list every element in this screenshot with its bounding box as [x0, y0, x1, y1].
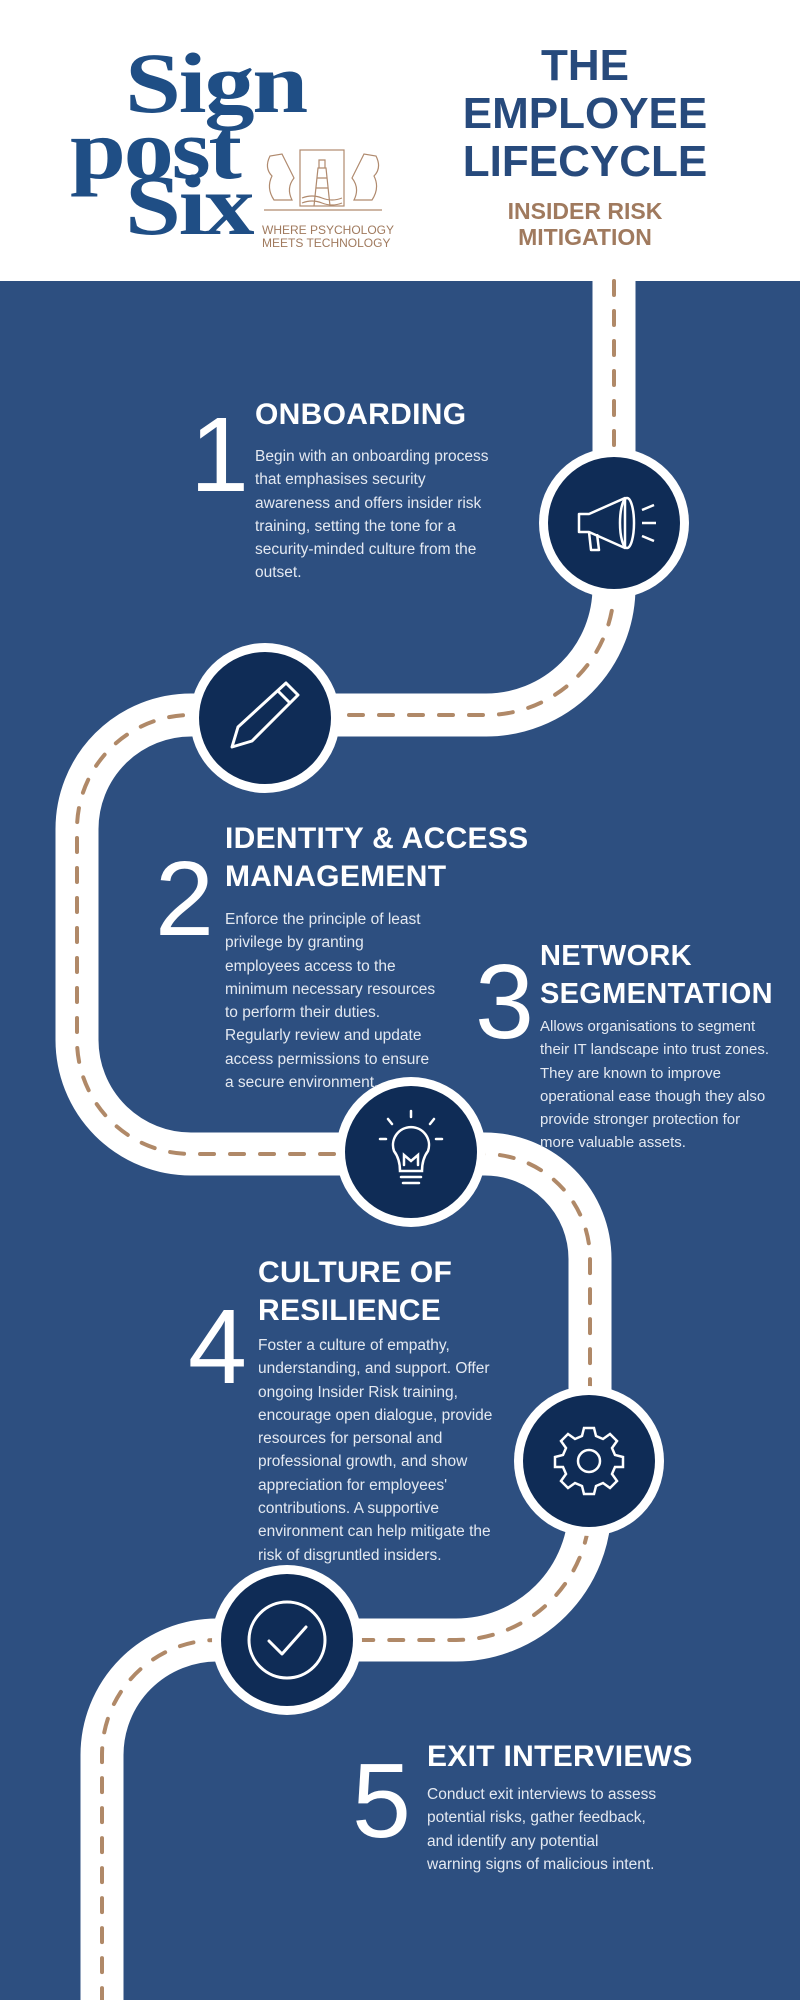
body 4: understanding, and support. Offer [258, 1360, 490, 1377]
body 1: outset. [255, 564, 302, 581]
heading 4: RESILIENCE [258, 1294, 441, 1327]
tagline: MEETS TECHNOLOGY [262, 236, 390, 250]
body 4: appreciation for employees' [258, 1477, 447, 1494]
body 2: access permissions to ensure [225, 1051, 429, 1068]
number 3: 3 [475, 943, 534, 1061]
body 2: privilege by granting [225, 934, 364, 951]
body 5: and identify any potential [427, 1833, 598, 1850]
number 5: 5 [352, 1742, 411, 1860]
body 4: professional growth, and show [258, 1453, 467, 1470]
heading 1: ONBOARDING [255, 398, 466, 431]
icon circle 5: check [212, 1565, 362, 1715]
heading 4: CULTURE OF [258, 1256, 452, 1289]
heading 2 [225, 822, 528, 893]
title: THE [541, 41, 629, 90]
step 5 [352, 1740, 693, 1873]
title [463, 41, 707, 186]
body 5: Conduct exit interviews to assess [427, 1786, 656, 1803]
heading 2: IDENTITY & ACCESS [225, 822, 528, 855]
step 4 [188, 1256, 492, 1564]
heading 3 [540, 940, 773, 1010]
icon circle 2: pencil [192, 643, 338, 793]
body 4: Foster a culture of empathy, [258, 1337, 450, 1354]
body 4: ongoing Insider Risk training, [258, 1384, 458, 1401]
body 2: Regularly review and update [225, 1027, 421, 1044]
subtitle [508, 198, 662, 250]
tagline: WHERE PSYCHOLOGY [262, 223, 394, 237]
body 2: to perform their duties. [225, 1004, 380, 1021]
body 4: environment can help mitigate the [258, 1523, 491, 1540]
subtitle: MITIGATION [518, 224, 652, 250]
body 3: their IT landscape into trust zones. [540, 1041, 769, 1058]
logo: Signpost Six: Sign [125, 35, 306, 131]
body 1: security-minded culture from the [255, 541, 476, 558]
body 4 [258, 1337, 492, 1564]
body 3: They are known to improve [540, 1065, 721, 1082]
number 2: 2 [155, 840, 214, 958]
body 2: minimum necessary resources [225, 981, 435, 998]
body 3: Allows organisations to segment [540, 1018, 755, 1035]
body 4: encourage open dialogue, provide [258, 1407, 492, 1424]
tagline [262, 223, 394, 250]
body 2: a secure environment. [225, 1074, 378, 1091]
subtitle: INSIDER RISK [508, 198, 662, 224]
heading 3: NETWORK [540, 940, 692, 972]
body 5: potential risks, gather feedback, [427, 1809, 646, 1826]
body 2: employees access to the [225, 958, 396, 975]
header band [0, 0, 800, 281]
number 4: 4 [188, 1288, 247, 1406]
logo: Signpost Six: post [70, 101, 240, 197]
heading 2: MANAGEMENT [225, 860, 446, 893]
number 1: 1 [190, 396, 249, 514]
logo: Signpost Six: Six [125, 157, 252, 253]
icon circle 4: gear [514, 1386, 664, 1536]
heading 3: SEGMENTATION [540, 978, 773, 1010]
body 1 [255, 448, 489, 581]
body 1: training, setting the tone for a [255, 518, 456, 535]
emblem [264, 149, 382, 211]
icon circle 1: megaphone [539, 451, 689, 597]
body 3: provide stronger protection for [540, 1111, 740, 1128]
step 3 [475, 940, 773, 1151]
body 1: awareness and offers insider risk [255, 495, 481, 512]
body 1: Begin with an onboarding process [255, 448, 489, 465]
body 3: operational ease though they also [540, 1088, 765, 1105]
logo: Signpost Six [70, 35, 394, 253]
body 3: more valuable assets. [540, 1134, 686, 1151]
icon circle 3: light bulb [338, 1077, 486, 1227]
body 1: that emphasises security [255, 471, 426, 488]
heading 4 [258, 1256, 452, 1327]
body 2: Enforce the principle of least [225, 911, 421, 928]
body 5 [427, 1786, 656, 1873]
body 4: risk of disgruntled insiders. [258, 1547, 442, 1564]
body 2 [225, 911, 435, 1091]
title: LIFECYCLE [463, 137, 707, 186]
step 1 [190, 396, 489, 581]
body 4: resources for personal and [258, 1430, 442, 1447]
heading 5: EXIT INTERVIEWS [427, 1740, 693, 1773]
step 2 [155, 822, 528, 1091]
body 5: warning signs of malicious intent. [427, 1856, 654, 1873]
body 3 [540, 1018, 769, 1151]
body 4: contributions. A supportive [258, 1500, 439, 1517]
title: EMPLOYEE [463, 89, 707, 138]
